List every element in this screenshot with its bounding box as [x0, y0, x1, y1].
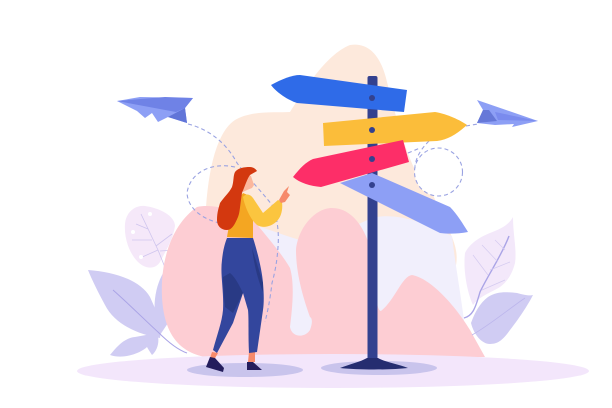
- signpost base: [340, 358, 408, 370]
- bolt: yellow sign: [369, 127, 375, 133]
- dashed circle: [414, 148, 462, 196]
- ground ellipse: [77, 354, 589, 388]
- hand: [279, 186, 290, 203]
- bolt: blue sign: [369, 95, 375, 101]
- trouser shadow: [223, 273, 243, 313]
- torso: [227, 193, 253, 238]
- face: [243, 174, 254, 192]
- arrow sign: yellow: [323, 112, 467, 146]
- signpost pole: [368, 76, 378, 362]
- ankles: [210, 352, 218, 360]
- yellow sleeve: [243, 194, 282, 227]
- cream background blob: [205, 45, 462, 335]
- arrow sign: periwinkle: [340, 173, 468, 234]
- leaf: lavender right: [471, 292, 533, 344]
- red hair: [217, 167, 257, 230]
- shadow under woman: [187, 363, 303, 377]
- bolt: red sign: [369, 156, 375, 162]
- trousers: [213, 238, 264, 353]
- shoes: [206, 357, 224, 372]
- arrow sign: blue: [271, 75, 407, 112]
- leaf: pale monstera: [125, 206, 175, 270]
- woman figure: [206, 167, 290, 372]
- dashed flight paths: [187, 124, 478, 322]
- leaf cluster: lavender left: [88, 270, 187, 357]
- paper plane: left: [117, 97, 193, 123]
- shadow under post: [321, 361, 437, 375]
- arrow sign: red: [293, 140, 409, 187]
- bolt: periwinkle sign: [369, 182, 375, 188]
- leaf: pale right: [464, 217, 516, 318]
- pink background blob: [162, 206, 485, 357]
- paper plane: right: [477, 100, 538, 127]
- lavender background shape: [240, 216, 470, 352]
